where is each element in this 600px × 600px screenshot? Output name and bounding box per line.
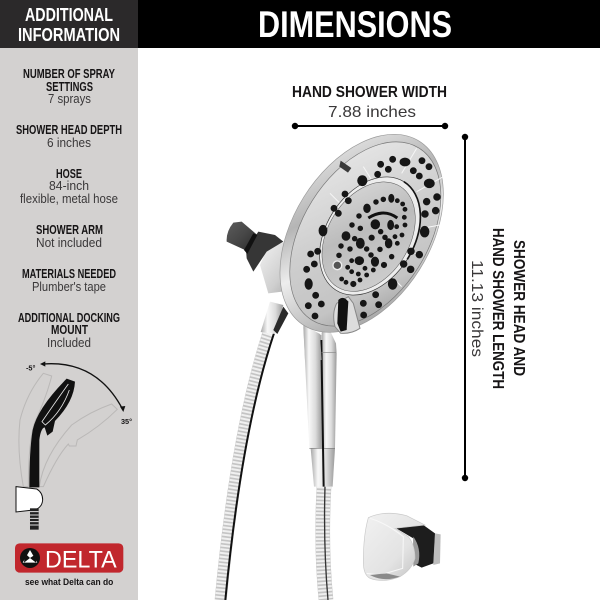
spec: shower head depth: SHOWER HEAD DEPTH bbox=[16, 123, 122, 137]
spec: shower arm bbox=[36, 223, 103, 250]
spec: additional docking mount bbox=[18, 311, 120, 350]
inner disc border bbox=[299, 158, 441, 314]
spec: spray settings: 7 sprays bbox=[48, 92, 91, 106]
spec: materials needed: Plumber's tape bbox=[32, 280, 106, 294]
inner spray disc bbox=[303, 165, 435, 309]
spec: hose: flexible, metal hose bbox=[20, 192, 118, 206]
spec: shower head depth bbox=[16, 123, 122, 150]
header bar: dimensions bbox=[138, 0, 600, 48]
illustration: docking mount bbox=[363, 513, 441, 580]
ring highlight bbox=[339, 161, 351, 173]
spray selector knob bbox=[333, 261, 342, 270]
text: shower head and hand shower length: HAND SHOWER LENGTH bbox=[489, 228, 506, 389]
arm connector bbox=[227, 222, 322, 360]
inner disc dark arc bbox=[370, 182, 441, 259]
illustration: hose and hand shower handle bbox=[221, 320, 337, 600]
text: hand shower width: 7.88 inches bbox=[328, 104, 416, 121]
panel heading: INFORMATION bbox=[18, 24, 120, 45]
text: shower head and hand shower length bbox=[468, 228, 527, 389]
illustration: shower head bbox=[227, 105, 477, 362]
text: shower head and hand shower length: SHOWER HEAD AND bbox=[510, 240, 527, 376]
panel: additional information bbox=[0, 0, 138, 600]
logo: delta bbox=[15, 543, 123, 587]
spec: additional docking mount: ADDITIONAL DOCKING bbox=[18, 311, 120, 325]
spec: materials needed bbox=[22, 267, 116, 294]
arrow: length dimension line bbox=[462, 134, 468, 481]
face radial streaks bbox=[330, 148, 443, 287]
spec: spray settings bbox=[23, 67, 115, 106]
text: shower head and hand shower length: 11.13 inches bbox=[468, 260, 485, 357]
logo: delta: see what Delta can do bbox=[25, 577, 114, 587]
spec: spray settings: SETTINGS bbox=[46, 80, 93, 94]
handle bbox=[303, 327, 322, 448]
panel heading: ADDITIONAL bbox=[25, 4, 113, 25]
text: hand shower width bbox=[292, 84, 447, 121]
outer ring bbox=[246, 105, 477, 362]
logo: delta: DELTA bbox=[45, 546, 117, 573]
spec: shower head depth: 6 inches bbox=[47, 136, 91, 150]
head face bbox=[258, 115, 472, 353]
arrow: width dimension line bbox=[292, 123, 448, 129]
spec: shower arm: SHOWER ARM bbox=[36, 223, 103, 237]
spec: additional docking mount: MOUNT bbox=[51, 323, 88, 337]
spec: hose: 84-inch bbox=[49, 179, 89, 193]
left hose bbox=[221, 333, 274, 600]
icon: hand shower pivot range: 35° bbox=[121, 417, 132, 426]
spray holes bbox=[304, 156, 440, 319]
icon: hand shower pivot range bbox=[16, 361, 132, 530]
spec: materials needed: MATERIALS NEEDED bbox=[22, 267, 116, 281]
text: hand shower width: HAND SHOWER WIDTH bbox=[292, 84, 447, 101]
spec: spray settings: NUMBER OF SPRAY bbox=[23, 67, 115, 81]
icon: hand shower pivot range: -5° bbox=[26, 364, 36, 373]
panel heading bbox=[0, 0, 138, 48]
spec: additional docking mount: Included bbox=[47, 336, 91, 350]
right hose bbox=[323, 487, 328, 600]
title: dimensions: DIMENSIONS bbox=[258, 4, 452, 45]
spec: shower arm: Not included bbox=[36, 236, 102, 250]
spec: hose: HOSE bbox=[56, 167, 82, 181]
spec: hose bbox=[20, 167, 118, 206]
release latch bbox=[334, 297, 360, 333]
curved spray slot bbox=[368, 213, 397, 218]
